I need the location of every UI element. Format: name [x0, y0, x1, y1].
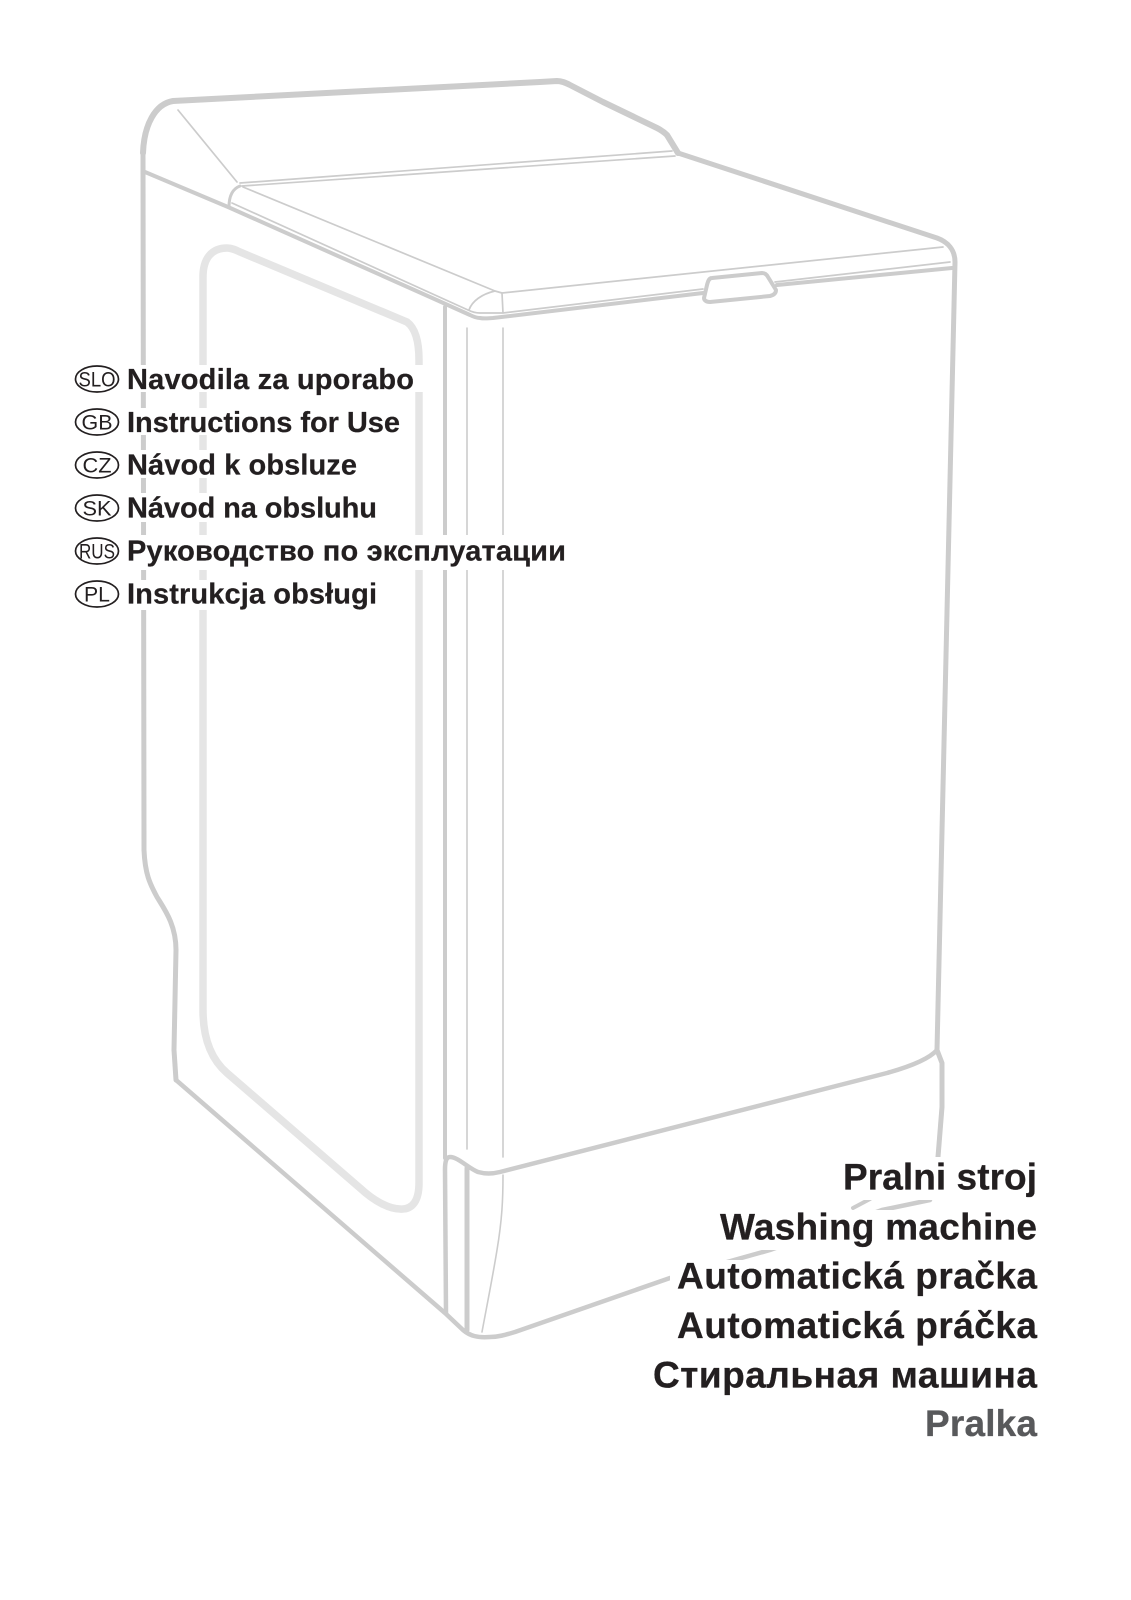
row: GB: GB — [82, 412, 112, 434]
name: Slovenian: Pralni stroj — [843, 1157, 1037, 1198]
name: Russian: Стиральная машина — [653, 1355, 1037, 1396]
front left vertical — [443, 307, 447, 1158]
row: SK: SK — [82, 498, 112, 520]
plinth corner vertical — [464, 1168, 470, 1330]
row: GB: Instructions for Use — [127, 407, 400, 439]
name: Czech: Automatická pračka — [677, 1256, 1037, 1297]
short line fragment — [853, 1199, 870, 1208]
plinth top edge — [445, 1050, 937, 1313]
door outline — [203, 248, 419, 1209]
row: PL: Instrukcja obsługi — [127, 579, 377, 611]
row: RUS: RUS — [79, 540, 115, 564]
thin lid lines — [178, 110, 950, 313]
row: PL: PL — [84, 584, 110, 606]
lid corner curve — [229, 186, 240, 207]
name: Slovak: Automatická práčka — [677, 1305, 1037, 1346]
lid handle — [704, 273, 776, 302]
language list — [70, 364, 578, 611]
left contour — [143, 153, 176, 1080]
right contour — [678, 153, 955, 1157]
row: CZ: CZ — [82, 454, 112, 478]
top left edge and front top edge — [145, 172, 952, 318]
row: CZ: Návod k obsluze — [127, 450, 357, 482]
row: RUS: Руководство по эксплуатации — [127, 536, 566, 568]
name: English: Washing machine — [720, 1207, 1037, 1248]
illustration: washing machine outline — [143, 81, 955, 1337]
row: SLO: Navodila za uporabo — [127, 364, 414, 396]
product names — [646, 1157, 1045, 1444]
row: SLO: SLO — [78, 368, 116, 392]
thin front verticals — [467, 328, 503, 1332]
top contour of control panel — [143, 81, 678, 153]
row: SK: Návod na obsluhu — [127, 492, 377, 524]
name: Polish: Pralka — [925, 1403, 1037, 1444]
bottom edge — [176, 1080, 930, 1337]
